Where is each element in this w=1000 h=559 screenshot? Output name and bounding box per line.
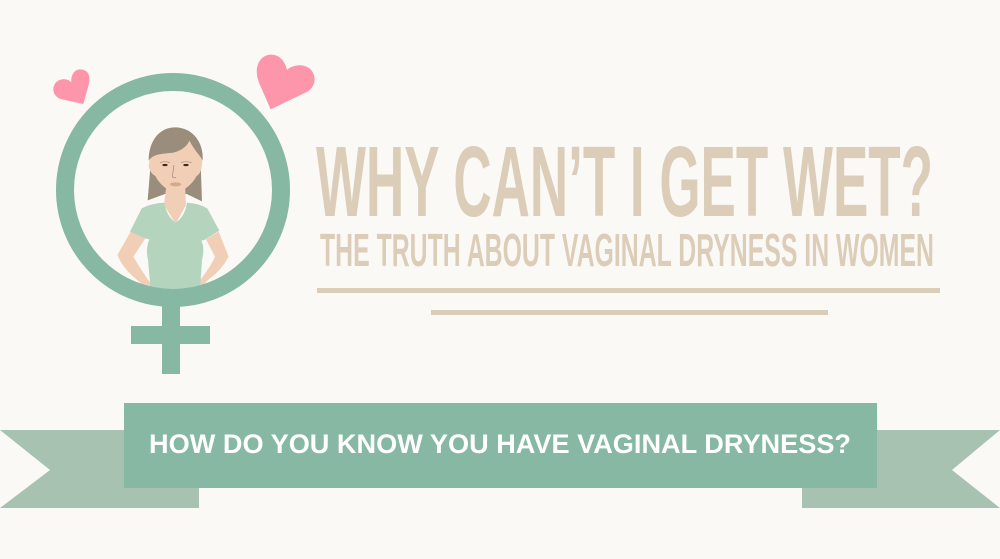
hair top	[149, 127, 203, 161]
rule: lower divider	[431, 310, 828, 315]
lips	[170, 182, 181, 186]
illustration: woman	[117, 127, 229, 290]
icon: female symbol	[65, 82, 281, 374]
stem	[162, 304, 180, 374]
neck	[164, 183, 186, 224]
shirt	[130, 203, 219, 290]
ring	[65, 82, 281, 298]
eyes and brows	[160, 162, 192, 166]
icon: large pink heart	[257, 55, 315, 109]
ribbon main panel	[124, 403, 877, 488]
ribbon banner	[0, 403, 1000, 508]
face	[149, 140, 202, 193]
arms	[117, 232, 229, 290]
rule: upper divider	[317, 288, 940, 293]
nose	[172, 165, 176, 178]
ribbon right tail	[802, 430, 1000, 508]
icon: small pink heart	[53, 69, 89, 104]
crossbar	[131, 326, 210, 344]
banner text: HOW DO YOU KNOW YOU HAVE VAGINAL DRYNESS?	[149, 429, 851, 459]
back hair	[148, 163, 202, 201]
ribbon left tail	[0, 430, 199, 508]
